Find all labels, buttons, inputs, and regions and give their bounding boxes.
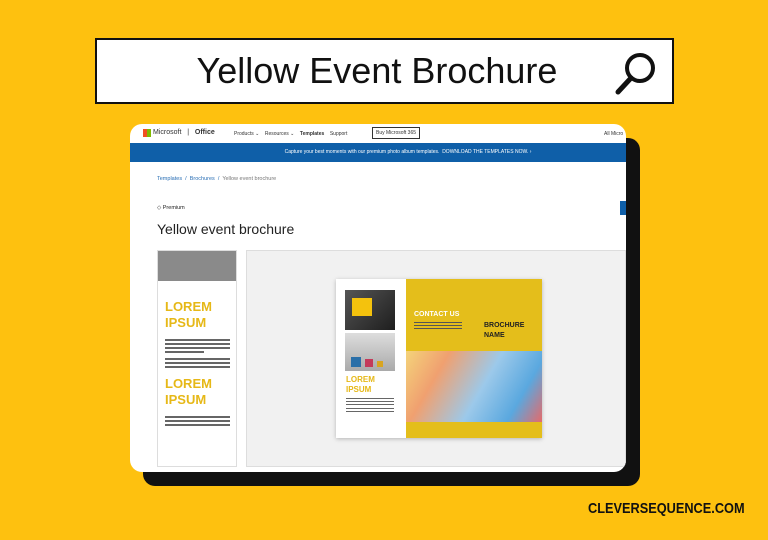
brochure: NAME [484, 332, 505, 339]
brochure: LOREM [346, 375, 375, 384]
thumbnail strip: LOREM [165, 376, 212, 391]
banner: Capture your best moments with our premium photo album templates. DOWNLOAD THE TEMPLATES NOW. › [285, 149, 531, 155]
brochure [336, 279, 542, 438]
screenshot card [130, 124, 626, 472]
nav bar: All Micro [604, 131, 623, 137]
thumbnail strip [157, 250, 237, 467]
page heading: Yellow event brochure [157, 221, 294, 237]
title: Yellow Event Brochure [197, 50, 557, 91]
nav bar: Buy Microsoft 365 [376, 130, 416, 136]
nav bar: Products ⌄ Resources ⌄ Templates Support [234, 131, 347, 137]
search bar [95, 38, 674, 104]
thumbnail strip: LOREM [165, 299, 212, 314]
banner [130, 143, 626, 162]
breadcrumb: Templates / Brochures / Yellow event brochure [157, 176, 276, 182]
thumbnail strip: IPSUM [165, 392, 206, 407]
brochure: BROCHURE [484, 322, 524, 329]
footer: site url: CLEVERSEQUENCE.COM [588, 500, 745, 517]
brochure: CONTACT US [414, 311, 459, 318]
brochure: IPSUM [346, 385, 371, 394]
nav bar [143, 127, 623, 139]
premium tag: ◇ Premium [157, 205, 185, 211]
nav bar: Microsoft | Office [153, 129, 215, 136]
card shadow [143, 138, 640, 486]
icon: magnifier [616, 53, 655, 94]
preview area [246, 250, 626, 467]
thumbnail strip: IPSUM [165, 315, 206, 330]
